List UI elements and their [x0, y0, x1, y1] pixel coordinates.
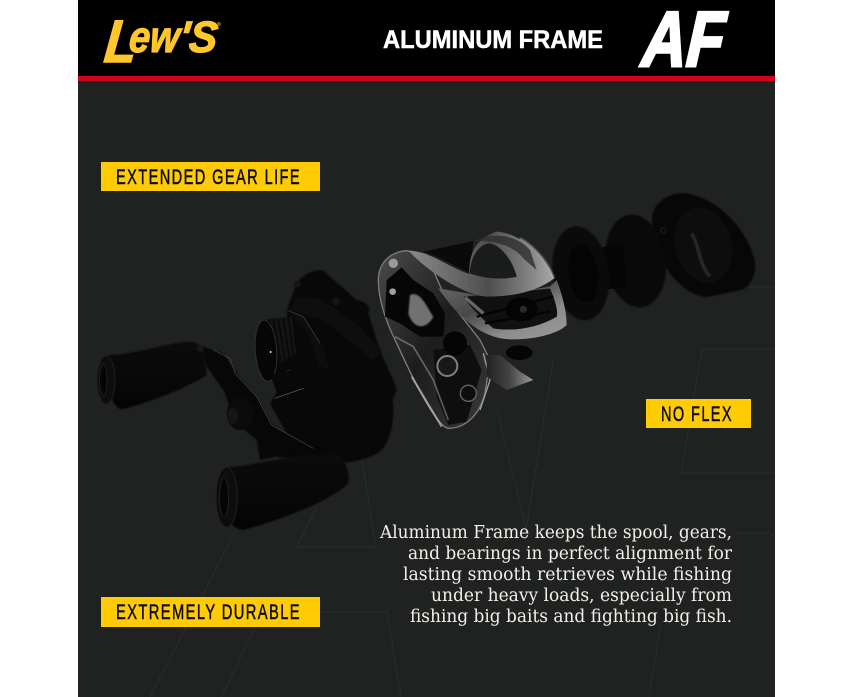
label: extremely durable: EXTREMELY DURABLE: [116, 601, 301, 624]
aluminum frame: [378, 232, 567, 428]
label: extended gear life: [101, 162, 320, 191]
reel: handle and side cover: [97, 270, 397, 530]
label: extremely durable: [101, 597, 320, 627]
text block: description: and bearings in perfect alignment for: [408, 544, 733, 564]
logo: Lew's: L: [102, 8, 141, 75]
label: extended gear life: EXTENDED GEAR LIFE: [116, 166, 301, 189]
side plate: [652, 193, 755, 297]
text block: description: [379, 523, 733, 627]
background line pattern: [150, 287, 775, 697]
spool flange front: [546, 223, 615, 324]
heading: ALUMINUM FRAME: [383, 26, 603, 54]
rear bar: [423, 241, 473, 273]
handle knob lower: [216, 453, 349, 530]
label: no flex: [646, 399, 751, 428]
side cover body: [270, 270, 397, 462]
spool hub: [597, 243, 627, 290]
spool flange rear: [599, 211, 672, 311]
label: no flex: NO FLEX: [661, 403, 733, 426]
text block: description: fishing big baits and fighting big fish.: [410, 607, 732, 627]
logo: Lew's: 'S: [177, 13, 220, 62]
handle knob upper: [97, 342, 207, 409]
logo: Lew's: ew: [127, 13, 184, 62]
star drag: [270, 370, 307, 400]
lower loop: [438, 280, 567, 339]
frame side plate: [378, 251, 490, 428]
reel: spool and side plate: [378, 193, 755, 428]
header bar: [78, 0, 775, 81]
frame window interior: [464, 289, 557, 330]
drag knob: [253, 317, 303, 382]
logo: Lew's: ®: [217, 21, 221, 28]
text block: description: under heavy loads, especially from: [431, 586, 732, 606]
handle arm: [202, 346, 323, 463]
gears and dark interior: [385, 267, 445, 337]
logo: Lew's: [102, 8, 221, 75]
thumb bar lever: [506, 345, 533, 360]
upper arch: [408, 232, 554, 297]
text block: description: Aluminum Frame keeps the spool, gears,: [379, 523, 732, 543]
text block: description: lasting smooth retrieves while fishing: [403, 565, 732, 585]
